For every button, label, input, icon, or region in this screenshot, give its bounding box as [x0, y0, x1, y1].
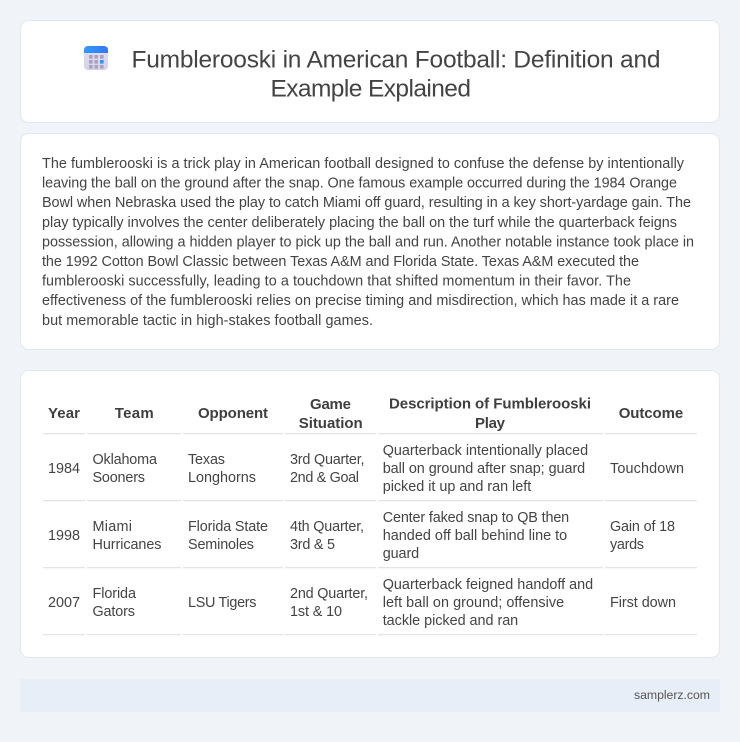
- table row: 1984: picked it up and ran left: [383, 479, 531, 495]
- icon: calendar: [84, 46, 108, 70]
- table row: 2007: LSU Tigers: [188, 595, 256, 611]
- table row: 1984: ball on ground after snap; guard: [383, 461, 585, 477]
- table row: 1984: Texas: [188, 452, 225, 468]
- header card: [20, 20, 720, 122]
- table header row: Game: [310, 396, 351, 413]
- title: Example Explained: [270, 76, 471, 102]
- table header row: Play: [475, 415, 506, 432]
- table row: 2007: 2nd Quarter,: [290, 586, 368, 602]
- paragraph: Bowl when Nebraska used the play to catch Miami off guard, resulting in a key short-yardage gain. The: [42, 195, 691, 211]
- table row: 1998: 3rd & 5: [290, 537, 335, 553]
- title: Fumblerooski in American Football: Definition and: [132, 46, 660, 74]
- table row: 2007: left ball on ground; offensive: [383, 595, 564, 611]
- table row: 1984: Oklahoma: [92, 452, 157, 468]
- table row: 1984: Longhorns: [188, 470, 256, 486]
- table row: 1984: 1984: [48, 461, 80, 477]
- table row: 2007: Gators: [92, 604, 135, 620]
- paragraph: The fumblerooski is a trick play in American football designed to confuse the defense by intentionally: [42, 156, 685, 172]
- paragraph: fumblerooski successfully, leading to a touchdown that shifted momentum in their favor. The: [42, 274, 631, 290]
- paragraph: but memorable tactic in high-stakes football games.: [42, 313, 373, 329]
- paragraph: [42, 156, 694, 329]
- table header row: Team: [115, 405, 154, 422]
- table header row: Description of Fumblerooski: [389, 396, 591, 412]
- table row: 1998: 4th Quarter,: [290, 519, 364, 535]
- table row: 1984: Quarterback intentionally placed: [383, 443, 588, 459]
- table row: 2007: First down: [610, 595, 676, 611]
- table row: 1998: Center faked snap to QB then: [383, 510, 569, 526]
- paragraph: play typically involves the center deliberately placing the ball on the turf while the quarterback feigns: [42, 215, 677, 231]
- table header row: [48, 396, 683, 432]
- table row: 1984: Sooners: [92, 470, 145, 486]
- table header row: Outcome: [619, 405, 683, 422]
- table row: 1984: 3rd Quarter,: [290, 452, 364, 468]
- panel: table: [20, 370, 720, 658]
- table header row: Year: [48, 405, 80, 422]
- table row: 2007: [48, 577, 676, 629]
- table row: 1998: Miami: [92, 519, 132, 535]
- table row: 1998: Florida State: [188, 519, 268, 535]
- title: [132, 46, 660, 102]
- table row: 2007: 1st & 10: [290, 604, 342, 620]
- paragraph: effectiveness of the fumblerooski relies on precise timing and misdirection, which has made it a rare: [42, 293, 679, 309]
- table header row: Situation: [299, 415, 363, 432]
- table row: 1998: guard: [383, 546, 419, 562]
- table row: 1998: Seminoles: [188, 537, 254, 553]
- table row: 2007: Quarterback feigned handoff and: [383, 577, 593, 593]
- table row: 1998: Hurricanes: [92, 537, 162, 553]
- table row: 1998: yards: [610, 537, 644, 553]
- table row: 1984: 2nd & Goal: [290, 470, 359, 486]
- paragraph: the 1992 Cotton Bowl Classic between Texas A&M and Florida State. Texas A&M executed the: [42, 254, 639, 270]
- table row: 1998: 1998: [48, 528, 80, 544]
- panel: definition text: [20, 134, 720, 350]
- table row: 1998: [48, 510, 675, 562]
- paragraph: leaving the ball on the ground after the snap. One famous example occurred during the 1984 Orange: [42, 176, 677, 192]
- table row: 2007: 2007: [48, 595, 80, 611]
- table header row: Opponent: [198, 405, 268, 422]
- paragraph: possession, allowing a hidden player to pick up the ball and run. Another notable instance took place in: [42, 234, 694, 250]
- table row: 1998: handed off ball behind line to: [383, 528, 567, 544]
- table row: 2007: tackle picked and ran: [383, 613, 518, 629]
- footer: [20, 679, 720, 712]
- table row: 1984: [48, 443, 684, 495]
- table row: 1998: Gain of 18: [610, 519, 675, 535]
- table row: 1984: Touchdown: [610, 461, 684, 477]
- table row: 2007: Florida: [92, 586, 136, 602]
- footer text: samplerz.com: [634, 688, 710, 702]
